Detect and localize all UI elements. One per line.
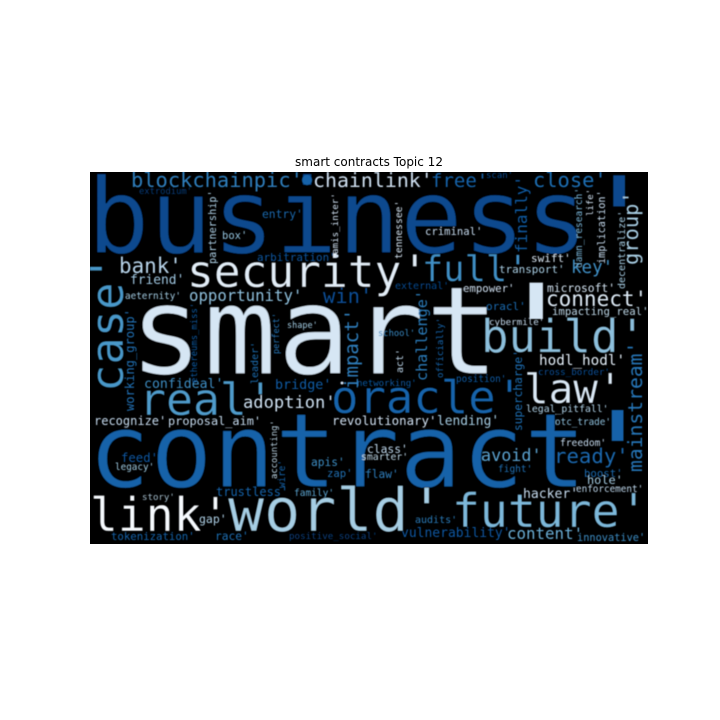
word: enforcement: enforcement' (576, 484, 643, 495)
word: case: case' (81, 255, 134, 392)
word: external: external' (395, 281, 449, 292)
word: chainlink: chainlink' (313, 169, 433, 192)
word: oracl: oracl' (486, 300, 526, 313)
word: otc_trade: otc_trade' (555, 417, 611, 428)
word: shape: shape' (287, 321, 318, 331)
word: oracle: oracle' (331, 371, 523, 424)
word: fight: fight' (498, 464, 532, 475)
word: close: close' (533, 168, 607, 192)
word: smart: smart' (129, 261, 573, 404)
word: swift: swift' (531, 252, 571, 265)
word: mainstream: mainstream' (624, 342, 647, 472)
word: arbitration: arbitration' (257, 251, 336, 264)
title: smart contracts Topic 12 (295, 155, 443, 169)
word: flaw: flaw' (365, 468, 399, 481)
word cloud panel (81, 156, 651, 546)
word: friend: friend' (130, 273, 184, 288)
word: lending: lending' (437, 414, 499, 429)
word: boost: boost' (584, 467, 623, 480)
word: adoption: adoption' (243, 393, 336, 413)
word: life: life' (586, 189, 596, 216)
word: leader: leader' (250, 342, 261, 384)
word: school: school' (378, 329, 415, 339)
word: avoid: avoid' (481, 445, 542, 465)
dot near amis_inter (335, 254, 339, 258)
word: link: link' (90, 488, 229, 542)
word: real: real' (139, 373, 274, 426)
black background (90, 172, 648, 544)
words (81, 156, 651, 546)
word: trustless: trustless' (216, 485, 288, 499)
word: world: world' (228, 476, 445, 546)
word: bridge: bridge' (275, 378, 331, 393)
word: security: security' (187, 247, 428, 298)
word: law: law' (524, 365, 622, 413)
word: tokenization: tokenization' (111, 530, 195, 543)
word: win: win' (323, 284, 372, 308)
word: race: race' (215, 530, 249, 543)
word: perfect: perfect' (272, 313, 282, 354)
word: impact: impact' (341, 309, 363, 389)
word: positive_social: positive_social' (289, 531, 378, 542)
word: connect: connect' (546, 287, 647, 311)
word: amis_inter: amis_inter' (330, 193, 341, 254)
word: freedom: freedom' (560, 438, 606, 449)
word: proposal_aim: proposal_aim' (168, 414, 261, 428)
word: impacting_real: impacting_real' (552, 305, 649, 318)
word: revolutionary: revolutionary' (332, 413, 436, 428)
word: transport: transport' (499, 263, 565, 276)
word: hacker: hacker' (523, 487, 578, 502)
word: box: box' (222, 230, 247, 242)
word: vulnerability: vulnerability' (401, 526, 511, 541)
word: partnership: partnership' (208, 190, 219, 264)
word: opportunity: opportunity' (189, 286, 302, 305)
word: damn_research: damn_research' (574, 188, 585, 268)
word: ethereums_miss: ethereums_miss' (190, 303, 200, 383)
word: cybermile: cybermile' (489, 317, 544, 328)
word: aeternity: aeternity' (125, 291, 181, 302)
word: officially: officially' (436, 318, 446, 378)
word: networking: networking' (357, 379, 417, 389)
word: family: family' (294, 488, 334, 499)
word: recognize: recognize' (94, 414, 166, 428)
word: microsoft: microsoft' (547, 282, 615, 295)
word: contract: contract' (88, 392, 649, 512)
word: decentralize: decentralize' (617, 211, 628, 289)
word: innovative: innovative' (577, 532, 645, 544)
word: key: key' (571, 258, 613, 278)
word: criminal: criminal' (425, 226, 482, 238)
word: business: business' (87, 156, 651, 278)
word: build: build' (481, 310, 646, 363)
word: smarter: smarter' (361, 452, 408, 463)
word: challenge: challenge' (413, 290, 431, 381)
word: group: group' (619, 191, 643, 265)
dot near impact (340, 382, 344, 384)
word: full: full' (422, 249, 529, 290)
word: cross_border: cross_border' (538, 367, 610, 378)
word: empower: empower' (463, 282, 514, 295)
word: blockchainpic: blockchainpic' (131, 168, 303, 192)
word: free: free' (431, 170, 488, 192)
word: content: content' (507, 524, 583, 543)
word: legacy: legacy' (115, 462, 154, 473)
word: act: act' (395, 349, 406, 373)
word: ready: ready' (554, 444, 629, 468)
word: extrodium: extrodium' (139, 187, 192, 197)
word: wire: wire' (277, 460, 288, 488)
dot (302, 175, 312, 185)
word: bank: bank' (119, 254, 182, 278)
word: feed: feed' (121, 451, 158, 465)
word: scan: scan' (486, 171, 513, 181)
word: legal_pitfall: legal_pitfall' (526, 404, 609, 415)
word: position: position' (456, 374, 506, 385)
word: hole: hole' (587, 473, 623, 487)
word: gap: gap' (199, 512, 227, 526)
word: zap: zap' (327, 468, 353, 480)
word: supercharge: supercharge' (512, 350, 525, 431)
word: confideal: confideal' (144, 377, 223, 392)
word: implication: implication' (597, 190, 608, 264)
word: story: story' (142, 493, 175, 503)
word: accounting: accounting' (270, 420, 280, 479)
word: working_group: working_group' (123, 309, 137, 411)
word: future: future' (452, 484, 648, 538)
word: class: class' (367, 443, 408, 456)
word: entry: entry' (262, 208, 303, 221)
word: audits: audits' (415, 515, 457, 526)
word: finally: finally' (512, 176, 531, 253)
word: hodl_hodl: hodl_hodl' (539, 353, 625, 369)
word: tennessee: tennessee' (394, 201, 405, 259)
word: apis: apis' (311, 456, 345, 469)
